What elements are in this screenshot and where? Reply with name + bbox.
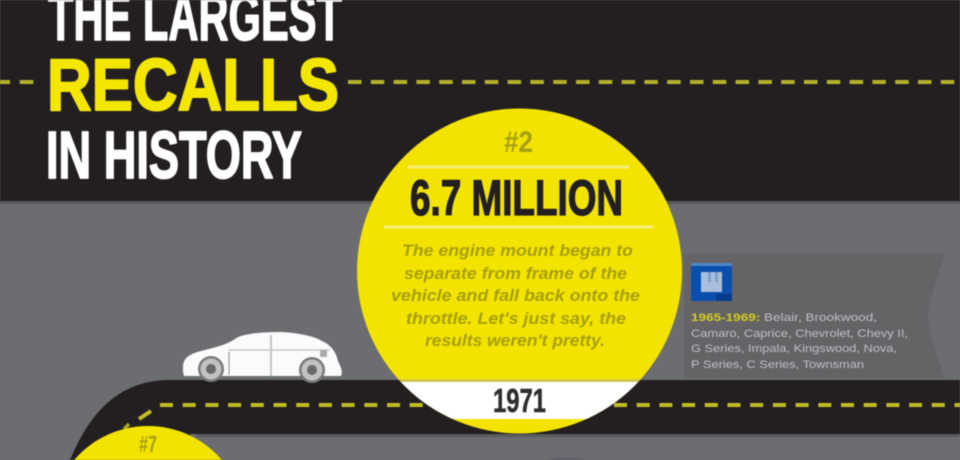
text: affected models [691, 312, 908, 371]
date band: 1971 [398, 378, 641, 420]
panel: #2 recall circle [350, 108, 690, 434]
text: affected models: Camaro, Caprice, Chevrolet, Chevy II, [691, 328, 908, 340]
headline figure: 6.7 MILLION [410, 170, 623, 226]
text: affected models: 1965-1969: Belair, Brookwood, [691, 312, 877, 324]
icon: GM logo [691, 263, 732, 301]
road [70, 380, 960, 460]
text: affected models: G Series, Impala, Kingswood, Nova, [691, 343, 897, 355]
icon: white car [183, 332, 342, 383]
next circle top edge [546, 458, 586, 460]
description: throttle. Let's just say, the [406, 309, 626, 328]
title: IN HISTORY [46, 118, 302, 193]
panel: GM recall models [684, 254, 945, 378]
gray background [0, 198, 960, 460]
description: vehicle and fall back onto the [391, 286, 640, 305]
date band: 1971: 1971 [493, 382, 546, 419]
rank label: #7 [139, 431, 157, 457]
rank label: #2 [504, 126, 533, 159]
text: affected models: P Series, C Series, Townsman [691, 359, 864, 371]
title [46, 0, 342, 193]
description: results weren't pretty. [425, 331, 605, 350]
panel: dark header band [0, 0, 960, 204]
description [391, 241, 640, 350]
title: RECALLS [47, 45, 339, 126]
description: separate from frame of the [404, 264, 627, 283]
description: The engine mount began to [402, 241, 633, 260]
panel: #7 recall circle [74, 426, 222, 460]
